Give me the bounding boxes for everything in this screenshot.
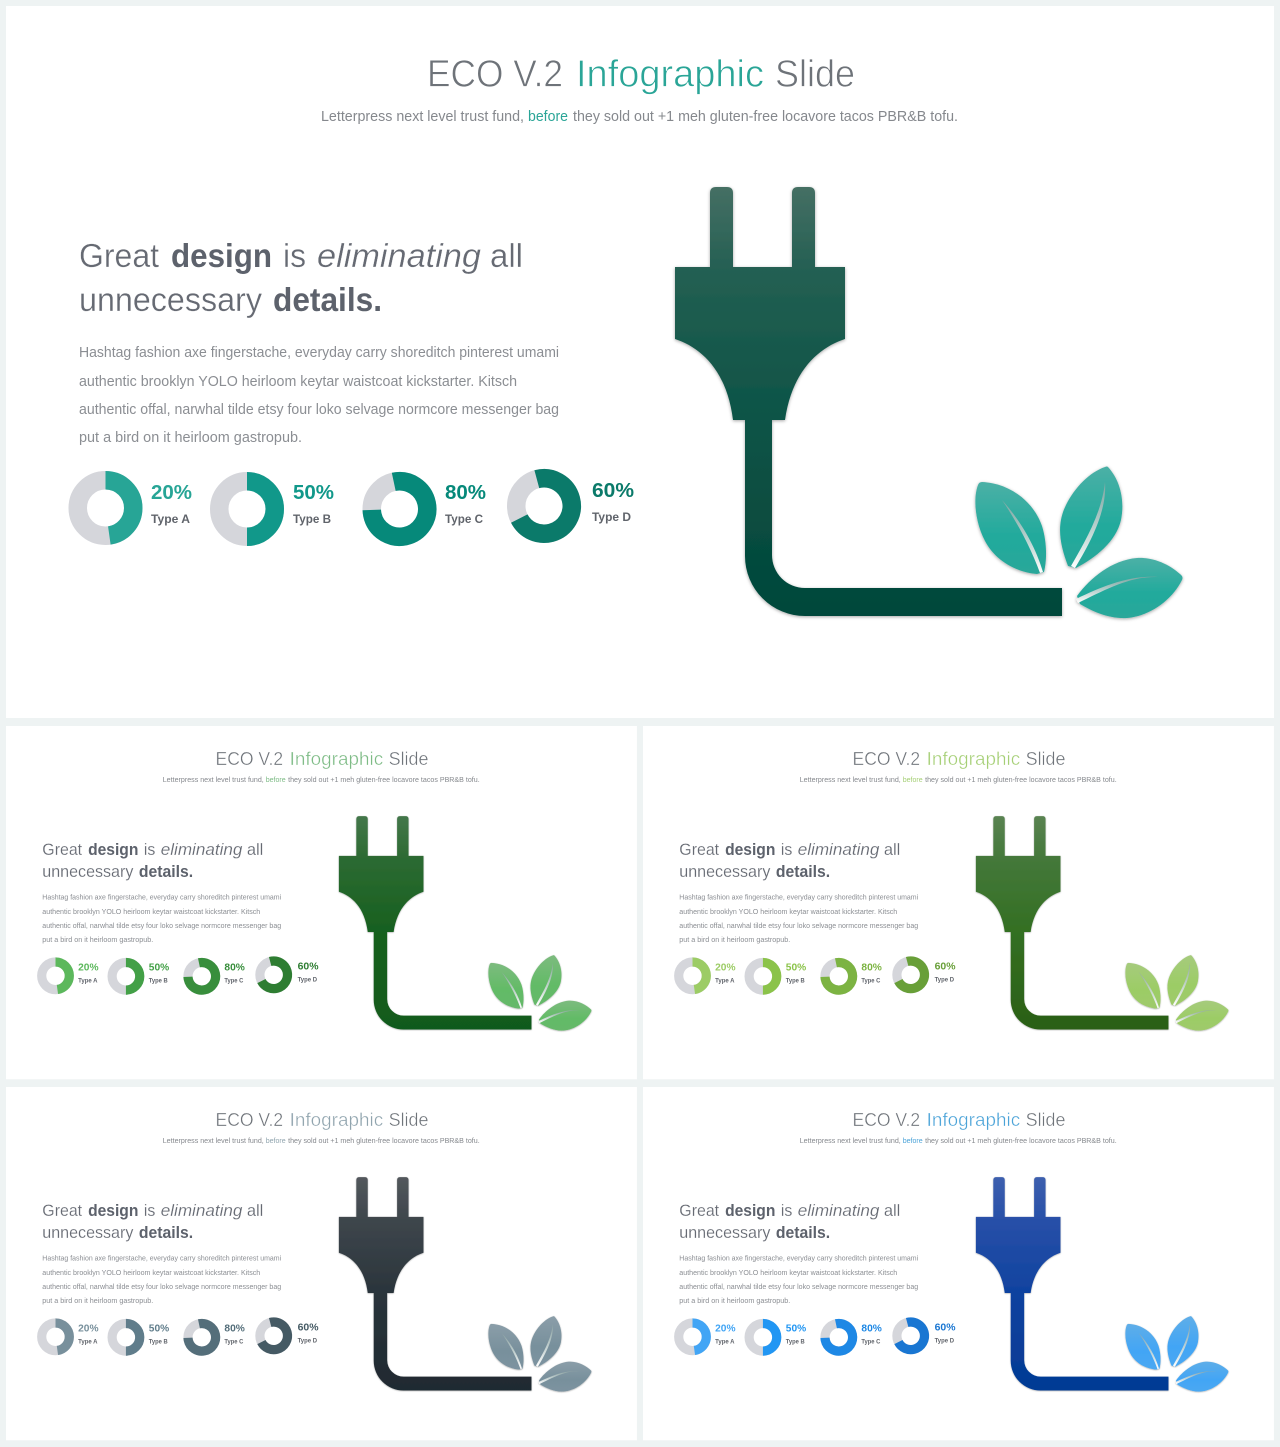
donut: Type A 20%: Type A: [151, 512, 190, 526]
title: [427, 54, 855, 96]
icon: leaves: [488, 955, 591, 1031]
heading: [679, 841, 900, 881]
subtitle: Letterpress next level trust fund,: [800, 775, 901, 784]
title: Slide: [389, 749, 428, 770]
donut: Type D 60%: 60%: [935, 1322, 956, 1333]
body text: Hashtag fashion axe fingerstache, everyday carry shoreditch pinterest umami: [42, 893, 282, 902]
subtitle: before: [266, 775, 286, 784]
donut: Type D 60%: 60%: [298, 961, 319, 972]
body text: put a bird on it heirloom gastropub.: [679, 1296, 790, 1305]
body text: [79, 345, 559, 446]
title: Slide: [775, 54, 855, 96]
body text: [42, 893, 282, 944]
donut: Type B 50%: [749, 1323, 806, 1351]
body text: put a bird on it heirloom gastropub.: [679, 935, 790, 944]
donut: Type B 50%: [112, 962, 169, 990]
donut: Type C 80%: 80%: [224, 1323, 245, 1334]
donut: Type D 60%: Type D: [298, 1338, 318, 1344]
title: Infographic: [290, 1110, 383, 1131]
subtitle: before: [903, 1136, 923, 1145]
body text: Hashtag fashion axe fingerstache, everyday carry shoreditch pinterest umami: [679, 1254, 919, 1263]
icon: leaves: [1125, 955, 1228, 1031]
heading: [679, 1202, 900, 1242]
body text: Hashtag fashion axe fingerstache, everyday carry shoreditch pinterest umami: [679, 893, 919, 902]
donut: Type D 60%: Type D: [935, 1338, 955, 1344]
heading: all: [247, 841, 263, 859]
heading: Great: [42, 841, 83, 859]
body text: authentic brooklyn YOLO heirloom keytar waistcoat kickstarter. Kitsch: [42, 907, 260, 916]
donut: Type C 80%: 80%: [861, 962, 882, 973]
title: [852, 749, 1065, 770]
title: Infographic: [927, 1110, 1020, 1131]
subtitle: Letterpress next level trust fund,: [800, 1136, 901, 1145]
title: ECO V.2: [215, 749, 283, 770]
heading: all: [490, 237, 523, 274]
heading: [42, 1202, 263, 1242]
heading: all: [247, 1202, 263, 1220]
donut: Type A 20%: [78, 480, 192, 536]
body text: authentic offal, narwhal tilde etsy four loko selvage normcore messenger bag: [42, 921, 281, 930]
heading: details.: [273, 281, 382, 318]
title: Slide: [1026, 1110, 1065, 1131]
subtitle: they sold out +1 meh gluten-free locavore tacos PBR&B tofu.: [925, 1136, 1117, 1145]
donut: Type D 60%: 60%: [298, 1322, 319, 1333]
body text: [42, 1254, 282, 1305]
body text: Hashtag fashion axe fingerstache, everyday carry shoreditch pinterest umami: [79, 345, 559, 361]
subtitle: before: [266, 1136, 286, 1145]
title: Slide: [389, 1110, 428, 1131]
heading: is: [144, 841, 155, 859]
donut: Type D 60%: Type D: [298, 977, 318, 983]
subtitle: they sold out +1 meh gluten-free locavore tacos PBR&B tofu.: [288, 1136, 480, 1145]
donut: Type D 60%: Type D: [592, 510, 631, 524]
donut: Type B 50%: Type B: [786, 1339, 805, 1345]
heading: Great: [679, 841, 720, 859]
title: Slide: [1026, 749, 1065, 770]
body text: [679, 1254, 919, 1305]
title: ECO V.2: [852, 1110, 920, 1131]
subtitle: [800, 775, 1117, 784]
heading: Great: [42, 1202, 83, 1220]
heading: design: [725, 1202, 775, 1220]
donut: Type C 80%: 80%: [224, 962, 245, 973]
title: [852, 1110, 1065, 1131]
body text: put a bird on it heirloom gastropub.: [42, 1296, 153, 1305]
heading: unnecessary: [42, 863, 134, 881]
subtitle: [163, 1136, 480, 1145]
subtitle: before: [903, 775, 923, 784]
subtitle: Letterpress next level trust fund,: [163, 775, 264, 784]
donut: Type A 20%: Type A: [715, 978, 735, 984]
donut: Type B 50%: 50%: [293, 482, 334, 504]
title: ECO V.2: [427, 54, 563, 96]
heading: is: [781, 1202, 792, 1220]
heading: eliminating: [798, 841, 879, 859]
subtitle: they sold out +1 meh gluten-free locavore tacos PBR&B tofu.: [925, 775, 1117, 784]
body text: authentic offal, narwhal tilde etsy four loko selvage normcore messenger bag: [679, 1282, 918, 1291]
heading: Great: [679, 1202, 720, 1220]
panel: slate slide: [6, 1087, 637, 1440]
donut: Type B 50%: Type B: [293, 512, 331, 526]
heading: all: [884, 1202, 900, 1220]
donut: Type C 80%: [822, 1321, 882, 1354]
donut: Type D 60%: [257, 1319, 319, 1353]
heading: details.: [139, 1224, 193, 1242]
body text: authentic brooklyn YOLO heirloom keytar waistcoat kickstarter. Kitsch: [679, 907, 897, 916]
title: [215, 1110, 428, 1131]
body text: put a bird on it heirloom gastropub.: [42, 935, 153, 944]
heading: is: [283, 237, 306, 274]
donut: Type A 20%: 20%: [78, 1323, 99, 1334]
donut: Type C 80%: [185, 1321, 245, 1354]
donut: Type B 50%: Type B: [149, 1339, 168, 1345]
donut: Type B 50%: [112, 1323, 169, 1351]
donut: Type A 20%: Type A: [78, 978, 98, 984]
subtitle: [800, 1136, 1117, 1145]
donut: Type C 80%: 80%: [861, 1323, 882, 1334]
heading: details.: [776, 1224, 830, 1242]
donut: Type D 60%: [894, 1319, 956, 1353]
donut: Type A 20%: 20%: [715, 962, 736, 973]
subtitle: they sold out +1 meh gluten-free locavore tacos PBR&B tofu.: [573, 109, 958, 125]
donut: Type B 50%: 50%: [149, 962, 169, 973]
donut: Type C 80%: Type C: [861, 1339, 881, 1345]
subtitle: Letterpress next level trust fund,: [321, 109, 524, 125]
donut: Type B 50%: Type B: [786, 978, 805, 984]
donut: Type A 20%: 20%: [151, 482, 192, 504]
donut: Type A 20%: [42, 962, 99, 990]
heading: is: [144, 1202, 155, 1220]
donut: Type B 50%: 50%: [786, 962, 806, 973]
body text: authentic offal, narwhal tilde etsy four loko selvage normcore messenger bag: [679, 921, 918, 930]
body text: put a bird on it heirloom gastropub.: [79, 430, 302, 446]
donut: Type D 60%: [510, 472, 634, 540]
panel: blue slide: [643, 1087, 1274, 1440]
heading: design: [725, 841, 775, 859]
heading: all: [884, 841, 900, 859]
title: ECO V.2: [852, 749, 920, 770]
panel: green slide: [6, 726, 637, 1079]
body text: Hashtag fashion axe fingerstache, everyday carry shoreditch pinterest umami: [42, 1254, 282, 1263]
heading: [42, 841, 263, 881]
icon: plug with cord: [339, 1177, 531, 1391]
panel: main teal slide: [6, 6, 1274, 718]
donut: Type D 60%: 60%: [935, 961, 956, 972]
heading: Great: [79, 237, 159, 274]
title: ECO V.2: [215, 1110, 283, 1131]
subtitle: they sold out +1 meh gluten-free locavore tacos PBR&B tofu.: [288, 775, 480, 784]
donut: Type C 80%: [185, 960, 245, 993]
donut: Type C 80%: Type C: [224, 978, 244, 984]
heading: unnecessary: [79, 281, 262, 318]
body text: authentic offal, narwhal tilde etsy four loko selvage normcore messenger bag: [79, 402, 559, 418]
title: Infographic: [576, 54, 764, 96]
heading: unnecessary: [42, 1224, 134, 1242]
subtitle: [163, 775, 480, 784]
heading: eliminating: [798, 1202, 879, 1220]
subtitle: [321, 109, 958, 125]
heading: design: [171, 237, 272, 274]
title: [215, 749, 428, 770]
donut: Type B 50%: [749, 962, 806, 990]
donut: Type C 80%: [367, 476, 486, 542]
donut: Type B 50%: Type B: [149, 978, 168, 984]
donut: Type B 50%: 50%: [786, 1323, 806, 1334]
subtitle: Letterpress next level trust fund,: [163, 1136, 264, 1145]
donut: Type A 20%: Type A: [715, 1339, 735, 1345]
donut: Type C 80%: Type C: [224, 1339, 244, 1345]
donut: Type A 20%: [679, 962, 736, 990]
heading: eliminating: [317, 237, 482, 274]
heading: eliminating: [161, 841, 242, 859]
donut: Type D 60%: 60%: [592, 480, 634, 502]
icon: leaves: [1125, 1316, 1228, 1392]
donut: Type D 60%: [257, 958, 319, 992]
heading: unnecessary: [679, 863, 771, 881]
donut: Type B 50%: 50%: [149, 1323, 169, 1334]
icon: plug with cord: [675, 187, 1062, 616]
donut: Type D 60%: Type D: [935, 977, 955, 983]
donut: Type A 20%: 20%: [78, 962, 99, 973]
heading: eliminating: [161, 1202, 242, 1220]
icon: plug with cord: [976, 816, 1168, 1030]
donut: Type D 60%: [894, 958, 956, 992]
heading: design: [88, 841, 138, 859]
body text: authentic brooklyn YOLO heirloom keytar waistcoat kickstarter. Kitsch: [679, 1268, 897, 1277]
icon: leaves: [975, 466, 1182, 618]
title: Infographic: [927, 749, 1020, 770]
panel: lime slide: [643, 726, 1274, 1079]
subtitle: before: [528, 109, 568, 125]
donut: Type C 80%: [822, 960, 882, 993]
heading: unnecessary: [679, 1224, 771, 1242]
body text: authentic offal, narwhal tilde etsy four loko selvage normcore messenger bag: [42, 1282, 281, 1291]
heading: details.: [776, 863, 830, 881]
title: Infographic: [290, 749, 383, 770]
donut: Type A 20%: 20%: [715, 1323, 736, 1334]
donut: Type B 50%: [219, 481, 334, 537]
donut: Type C 80%: 80%: [445, 482, 486, 504]
donut: Type A 20%: Type A: [78, 1339, 98, 1345]
icon: leaves: [488, 1316, 591, 1392]
heading: design: [88, 1202, 138, 1220]
heading: details.: [139, 863, 193, 881]
donut: Type A 20%: [42, 1323, 99, 1351]
donut: Type C 80%: Type C: [445, 512, 483, 526]
donut: Type C 80%: Type C: [861, 978, 881, 984]
heading: [79, 237, 523, 318]
donut: Type A 20%: [679, 1323, 736, 1351]
icon: plug with cord: [976, 1177, 1168, 1391]
icon: plug with cord: [339, 816, 531, 1030]
body text: [679, 893, 919, 944]
body text: authentic brooklyn YOLO heirloom keytar waistcoat kickstarter. Kitsch: [42, 1268, 260, 1277]
body text: authentic brooklyn YOLO heirloom keytar waistcoat kickstarter. Kitsch: [79, 374, 517, 390]
heading: is: [781, 841, 792, 859]
